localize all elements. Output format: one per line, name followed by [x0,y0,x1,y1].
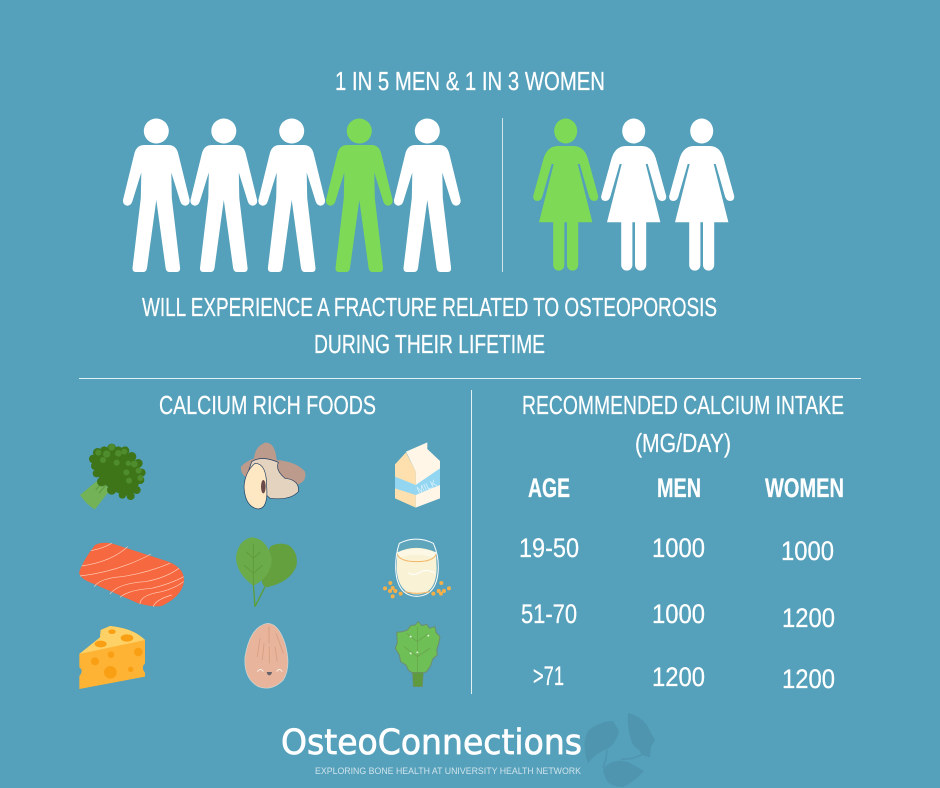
heading: calcium rich foods: CALCIUM RICH FOODS [159,390,376,420]
heading: statistic: 1 IN 5 MEN & 1 IN 3 WOMEN [335,66,605,96]
table rows: 1200 [782,664,835,694]
statement text: DURING THEIR LIFETIME [314,329,545,359]
women pictogram row [533,118,734,271]
statement text: WILL EXPERIENCE A FRACTURE RELATED TO OSTEOPOROSIS [142,292,717,322]
table header [528,473,844,503]
logo: OsteoConnections [281,713,655,787]
table header: AGE [528,473,570,503]
table header: WOMEN [765,473,844,503]
table rows: >71 [533,661,564,691]
calcium intake table [519,473,844,694]
table rows [519,533,835,694]
food icons [77,442,451,689]
table rows: 19-50 [519,533,579,563]
table rows: 1000 [781,536,834,566]
icon: cheese [77,626,145,689]
table rows: 1000 [652,533,705,563]
icon: milk carton [395,442,440,508]
table rows: 1200 [782,603,835,633]
statement text [142,292,717,359]
icon: leafy greens [395,622,440,687]
icon: salmon [79,543,184,607]
icon: milk carton: MILK [415,478,439,497]
icon: beans [241,443,305,509]
table header: MEN [657,473,701,503]
heading: recommended calcium intake: (MG/DAY) [635,428,731,458]
table rows: 51-70 [521,599,577,629]
logo: OsteoConnections: OsteoConnections [281,723,582,763]
men pictogram row [123,118,461,272]
logo mark [584,713,655,787]
icon: spinach [236,537,297,607]
icon: broccoli [80,444,146,509]
table rows: 1200 [652,662,705,692]
logo: OsteoConnections: EXPLORING BONE HEALTH AT UNIVERSITY HEALTH NETWORK [315,766,581,776]
icon: soy milk glass [383,539,451,598]
icon: almond [245,623,288,688]
heading: recommended calcium intake [522,390,844,458]
table rows: 1000 [652,599,705,629]
